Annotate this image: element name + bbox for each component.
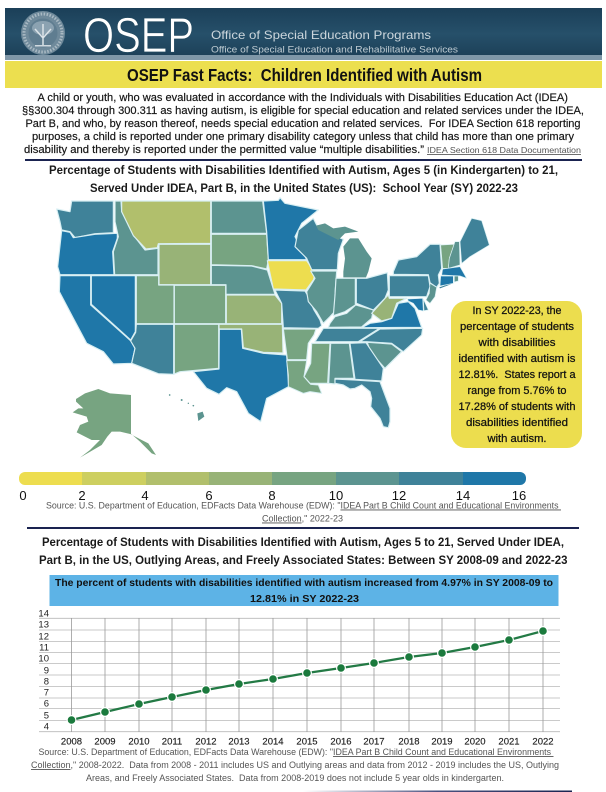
state: Oklahoma bbox=[219, 324, 283, 353]
x axis labels: 2010 bbox=[128, 736, 150, 748]
x axis labels: 2016 bbox=[330, 736, 352, 748]
callout: state range: with autism. bbox=[486, 433, 546, 445]
x axis labels: 2019 bbox=[431, 736, 453, 748]
state: Michigan lower peninsula bbox=[343, 238, 372, 277]
x axis labels: 2018 bbox=[398, 736, 420, 748]
y axis labels: 5 bbox=[44, 710, 49, 722]
state: Kansas bbox=[226, 295, 282, 324]
state: Missouri bbox=[275, 290, 322, 328]
y axis labels: 11 bbox=[39, 642, 49, 654]
callout: state range: disabilities identified bbox=[466, 417, 568, 429]
state: Vermont bbox=[441, 244, 454, 268]
intro definition text: §§300.304 through 300.311 as having autism, is eligible for special education and related services under the IDEA, bbox=[22, 105, 584, 117]
state: Idaho bbox=[113, 201, 158, 275]
state: West Virginia bbox=[372, 295, 407, 321]
map source note: Collection," 2022-23 bbox=[262, 514, 343, 524]
parent office name: Office of Special Education and Rehabilitative Services bbox=[211, 44, 458, 56]
y axis labels: 4 bbox=[44, 722, 49, 732]
line chart bbox=[38, 608, 560, 748]
icon: department seal bbox=[21, 11, 65, 55]
callout: state range: percentage of students bbox=[460, 321, 574, 333]
state: Kentucky bbox=[328, 305, 373, 327]
state: New Hampshire bbox=[448, 242, 460, 268]
y axis labels: 8 bbox=[44, 676, 49, 688]
map legend: 16 bbox=[512, 488, 526, 503]
state: North Carolina bbox=[360, 328, 423, 352]
state: Hawaii bbox=[169, 394, 204, 421]
intro definition text bbox=[22, 92, 584, 156]
map legend bbox=[19, 472, 526, 503]
state: Rhode Island bbox=[454, 276, 458, 282]
y axis labels: 7 bbox=[44, 688, 49, 698]
chart source note: Areas, and Freely Associated States. Data from 2008-2019 does not include 5 year olds in kindergarten. bbox=[86, 773, 504, 783]
state: Alabama bbox=[329, 343, 354, 384]
state: Indiana bbox=[333, 278, 355, 316]
map legend: 0 bbox=[19, 488, 27, 503]
chart source note bbox=[31, 747, 559, 783]
x axis labels: 2015 bbox=[296, 736, 318, 748]
x axis labels: 2009 bbox=[94, 736, 116, 748]
x axis labels: 2022 bbox=[532, 736, 554, 748]
trend callout: 12.81% in SY 2022-23 bbox=[250, 593, 359, 605]
state: Virginia bbox=[362, 302, 422, 328]
state: South Dakota bbox=[211, 234, 268, 269]
map legend: 4 bbox=[141, 488, 149, 503]
state: Iowa bbox=[267, 261, 315, 290]
state: Delaware bbox=[423, 299, 428, 311]
trend callout bbox=[50, 575, 558, 606]
choropleth map of US states bbox=[57, 198, 489, 458]
map legend: 10 bbox=[329, 488, 343, 503]
callout: state range: range from 5.76% to bbox=[468, 385, 566, 397]
map legend: 8 bbox=[268, 488, 276, 503]
title band bbox=[5, 61, 602, 88]
state: Washington bbox=[57, 201, 113, 238]
state: Ohio bbox=[356, 273, 388, 310]
state: Georgia bbox=[350, 343, 383, 381]
map legend: 6 bbox=[205, 488, 213, 503]
state: Long Island bbox=[439, 283, 451, 288]
state: Wyoming bbox=[159, 244, 211, 285]
eastern states bbox=[275, 218, 489, 428]
x axis labels bbox=[61, 736, 554, 748]
state: New York bbox=[393, 244, 442, 287]
x axis labels: 2017 bbox=[363, 736, 385, 748]
y axis labels: 13 bbox=[38, 620, 49, 630]
x axis labels: 2014 bbox=[262, 736, 284, 748]
trend chart heading: Part B, in the US, Outlying Areas, and Freely Associated States: Between SY 2008-09 and 2022-23 bbox=[39, 555, 568, 567]
intro definition text: A child or youth, who was evaluated in accordance with the Individuals with Disabilities Education Act (IDEA) bbox=[38, 92, 568, 104]
state: Oregon bbox=[58, 231, 117, 275]
office name: Office of Special Education Programs bbox=[211, 28, 431, 42]
y axis labels: 9 bbox=[44, 666, 49, 676]
callout: state range: In SY 2022-23, the bbox=[472, 305, 562, 317]
y axis labels: 12 bbox=[38, 632, 49, 642]
map heading: Percentage of Students with Disabilities Identified with Autism, Ages 5 (in Kindergarten) to 21, bbox=[49, 165, 558, 177]
y axis labels: 6 bbox=[44, 698, 49, 710]
state: California bbox=[59, 276, 135, 364]
x axis labels: 2008 bbox=[61, 736, 82, 748]
callout: state range bbox=[451, 301, 582, 448]
state: Mississippi bbox=[304, 343, 330, 383]
intro definition text: Part B, and who, by reason thereof, needs special education and related services. For IDEA Section 618 reporting bbox=[26, 118, 580, 130]
state: South Carolina bbox=[367, 342, 402, 368]
state: New Mexico bbox=[174, 324, 219, 374]
state: Minnesota bbox=[263, 198, 318, 260]
callout: state range: with disabilities bbox=[477, 337, 556, 349]
state: Louisiana bbox=[287, 361, 322, 393]
x axis labels: 2021 bbox=[498, 736, 520, 748]
state: New Jersey bbox=[426, 283, 437, 303]
state: Pennsylvania bbox=[389, 276, 430, 297]
callout: state range: 17.28% of students with bbox=[458, 401, 576, 413]
trend callout: The percent of students with disabilities identified with autism increased from 4.97% in SY 2008-09 to bbox=[55, 577, 553, 589]
data points bbox=[67, 627, 547, 724]
logo wordmark: OSEP bbox=[83, 9, 194, 63]
state: Texas bbox=[193, 329, 289, 422]
state: North Dakota bbox=[211, 201, 267, 233]
map legend: 2 bbox=[78, 488, 86, 503]
map legend: 14 bbox=[456, 488, 470, 503]
state: Nebraska bbox=[211, 265, 275, 294]
state: Nevada bbox=[91, 276, 135, 340]
header banner bbox=[5, 8, 602, 63]
state: Maine bbox=[460, 218, 489, 263]
state: Colorado bbox=[174, 285, 226, 324]
western states bbox=[57, 198, 318, 458]
state: Connecticut bbox=[440, 276, 453, 286]
chart source note: Collection," 2008-2022. Data from 2008 - 2011 includes US and Outlying areas and data from 2012 - 2019 includes the US, Outlying bbox=[31, 760, 559, 770]
chart source note: Source: U.S. Department of Education, EDFacts Data Warehouse (EDW): "IDEA Part B Child Count and Educational Environments bbox=[38, 747, 554, 757]
state: Utah bbox=[136, 276, 174, 324]
state: Michigan upper peninsula bbox=[316, 223, 358, 240]
map heading: Served Under IDEA, Part B, in the United States (US): School Year (SY) 2022-23 bbox=[90, 183, 518, 195]
x axis labels: 2011 bbox=[162, 736, 182, 748]
map source note: Source: U.S. Department of Education, EDFacts Data Warehouse (EDW): "IDEA Part B Child Count and Educational Environments bbox=[46, 500, 561, 510]
state: Wisconsin bbox=[295, 218, 343, 270]
state: Arkansas bbox=[283, 329, 316, 360]
state: Illinois bbox=[307, 271, 337, 323]
state: Montana bbox=[122, 201, 211, 249]
callout: state range: 12.81%. States report a bbox=[458, 369, 576, 381]
state: Tennessee bbox=[315, 328, 379, 342]
state: Maryland bbox=[407, 298, 423, 311]
state: Alaska bbox=[73, 389, 156, 458]
data line bbox=[72, 631, 543, 720]
x axis labels: 2013 bbox=[228, 736, 250, 748]
map heading bbox=[49, 165, 558, 195]
map legend: 12 bbox=[392, 488, 406, 503]
intro definition text: IDEA Section 618 Data Documentation bbox=[427, 145, 581, 155]
callout: state range: identified with autism is bbox=[458, 353, 576, 365]
trend chart heading: Percentage of Students with Disabilities Identified with Autism, Ages 5 to 21, Served Under IDEA, bbox=[42, 537, 564, 549]
y axis labels bbox=[38, 608, 49, 732]
map source note bbox=[46, 500, 561, 524]
x axis labels: 2012 bbox=[195, 736, 217, 748]
state: Florida bbox=[335, 379, 390, 428]
intro definition text: purposes, a child is reported under one primary disability category unless that child has more than one primary bbox=[32, 131, 574, 143]
state: Massachusetts bbox=[442, 267, 467, 278]
x axis labels: 2020 bbox=[464, 736, 486, 748]
title band: OSEP Fast Facts: Children Identified with Autism bbox=[127, 65, 482, 85]
y axis labels: 14 bbox=[38, 608, 49, 620]
trend chart heading bbox=[39, 537, 568, 567]
intro definition text: disability and thereby is reported under the permitted value “multiple disabilities.” bbox=[24, 144, 424, 156]
state: Arizona bbox=[131, 324, 174, 374]
y axis labels: 10 bbox=[38, 654, 49, 664]
